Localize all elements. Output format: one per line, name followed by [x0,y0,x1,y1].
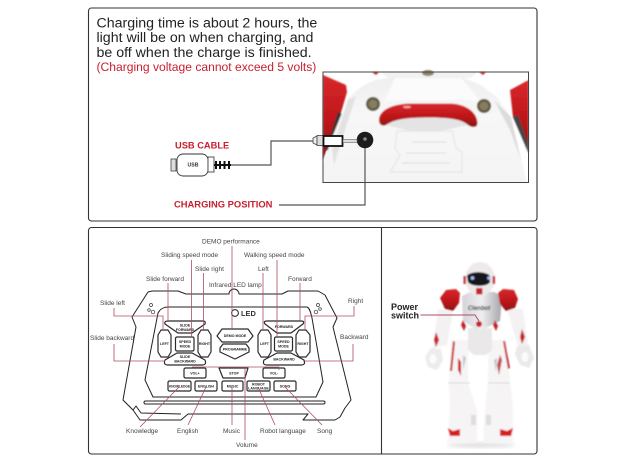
left control pad: SPEED [179,340,191,344]
charging instructions: Charging time is about 2 hours, the [96,16,317,32]
centre buttons: DEMO MODE [224,334,247,338]
led lamp: LED [241,309,256,318]
panel: charging [88,8,537,221]
function labels [90,239,369,449]
panel: controller and robot [88,228,537,454]
volume and stop buttons: VOL- [270,372,279,376]
function buttons: MUSIC [227,384,239,388]
volume and stop buttons: STOP [229,372,239,376]
icon: charging socket [357,132,373,148]
charging instructions: (Charging voltage cannot exceed 5 volts) [96,60,316,74]
label: charging position: CHARGING POSITION [174,198,273,210]
controller shell [123,289,351,420]
function labels: Slide forward [146,276,184,283]
usb cable line [231,141,313,165]
left control pad: LEFT [160,342,170,346]
icon: usb plug [171,154,231,176]
photo: robot back [323,70,528,182]
left control pad: SLIDE [180,324,191,328]
right control pad: SPEED [277,340,290,344]
function labels: English [177,428,199,435]
legs [448,340,477,443]
function labels: Slide backward [90,335,134,342]
function labels: DEMO performance [202,239,260,246]
volume and stop buttons [184,368,285,378]
label: power switch [391,302,479,321]
left control pad: MODE [180,344,191,348]
charging instructions: light will be on when charging, and [96,30,313,46]
left control pad: BACKWARD [174,360,196,364]
floor shadow [447,442,515,448]
function buttons: LANGUAGE [248,386,269,390]
left control pad: FORWARD [176,328,195,332]
function labels: Music [223,428,241,435]
charging position leader [279,148,365,205]
function labels: Volume [236,442,258,449]
icon: usb plug: USB [188,162,199,168]
left control pad: RIGHT [199,342,211,346]
function labels: Sliding speed mode [161,252,218,259]
shoulders [440,289,460,311]
photo: robot [425,262,534,448]
right control pad: LEFT [260,342,270,346]
function labels: Robot language [260,428,306,435]
charging instructions [96,16,317,74]
function labels: Forward [288,276,312,283]
centre buttons: PROGRAMME [223,348,248,352]
charging instructions: be off when the charge is finished. [96,45,312,61]
function buttons: ENGLISH [198,384,214,388]
function labels: Song [317,428,333,435]
function buttons: ROBOT [252,382,266,386]
led lamp [232,309,256,318]
function labels: Knowledge [126,428,159,435]
torso [462,292,502,331]
hips [468,328,492,355]
right control pad: FORWARD [275,325,294,329]
controller diagram [90,239,369,449]
label: power switch: Power [391,302,419,312]
arms [433,309,453,348]
function buttons: KNOWLEDGE [169,384,190,388]
head [465,262,495,296]
right control pad [258,321,310,365]
left control pad: SLIDE [180,355,191,359]
function labels: Left [258,266,269,273]
label: usb cable: USB CABLE [175,140,229,150]
function labels: Slide left [100,300,125,307]
function labels: Infrared LED lamp [209,282,262,289]
function labels: Walking speed mode [244,252,305,259]
centre buttons [217,329,253,359]
volume and stop buttons: VOL+ [190,372,200,376]
left control pad [158,321,211,365]
leader lines [114,246,354,440]
right control pad: RIGHT [297,342,309,346]
right control pad: BACKWARD [273,358,295,362]
icon: charging plug [313,136,357,146]
function labels: Right [348,298,363,305]
function labels: Slide right [195,266,224,273]
label: power switch: switch [391,310,419,320]
function labels: Backward [340,334,369,341]
photo: robot: Clenbot [468,306,491,312]
function buttons [168,381,296,391]
right control pad: MODE [278,344,289,348]
function buttons: SONG [280,384,290,388]
